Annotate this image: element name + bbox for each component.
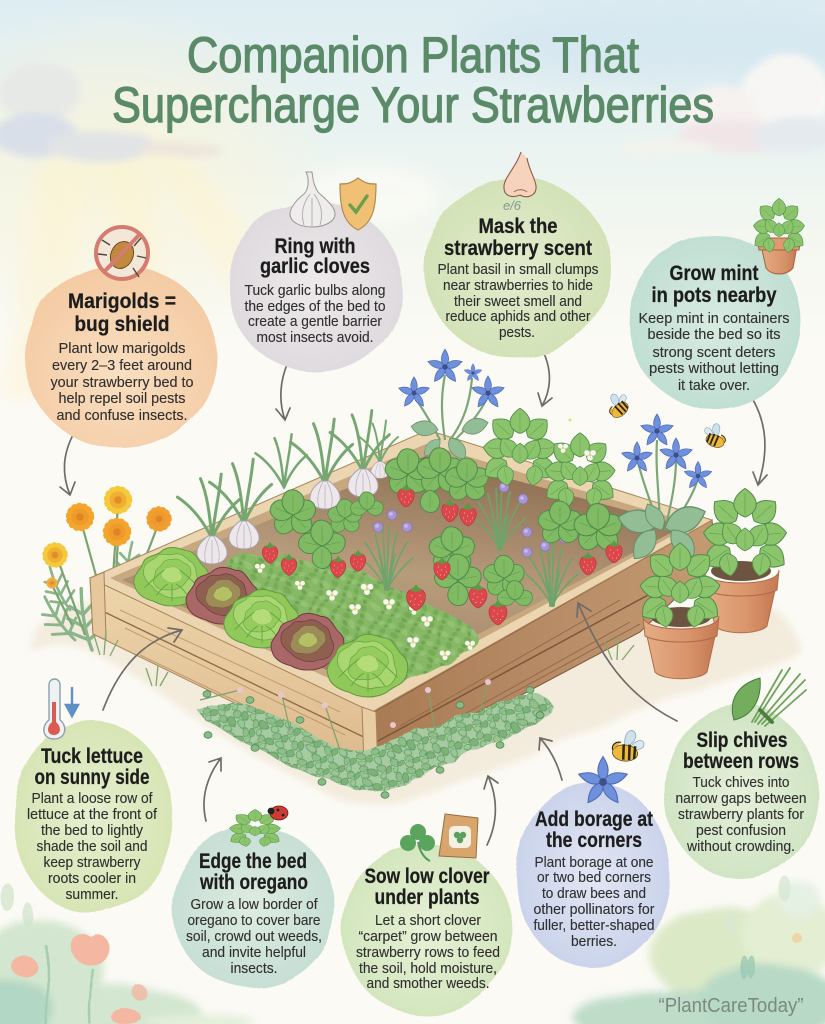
panel: mask scent: Plant basil in small clumps — [438, 262, 598, 278]
panel: lettuce: lettuce at the front of — [27, 807, 158, 823]
panel: mask scent: their sweet smell and — [454, 294, 582, 310]
panel: lettuce: the bed to lightly — [41, 823, 144, 839]
panel: chives — [665, 668, 817, 879]
panel: borage: other pollinators for — [534, 902, 655, 918]
panel: marigolds: help repel soil pests — [58, 391, 186, 407]
panel: marigolds: and confuse insects. — [56, 408, 188, 424]
panel: marigolds: Plant low marigolds — [58, 341, 186, 357]
panel: garlic — [228, 172, 402, 372]
bed: corner posts — [90, 572, 106, 640]
icon: mint pot — [751, 198, 807, 274]
panel: mint — [628, 198, 807, 409]
panel: mint: it take over. — [678, 378, 750, 394]
panel: mint: pests without letting — [649, 361, 779, 377]
icon: basil leaf — [732, 678, 760, 720]
oregano border — [195, 679, 552, 798]
icon: borage flower and bee — [577, 726, 648, 806]
panel: mask scent: near strawberries to hide — [443, 278, 593, 294]
arrow: garlic — [276, 358, 290, 420]
panel: lettuce: Tuck lettuce — [41, 745, 143, 768]
panel: oregano: and invite helpful — [202, 945, 306, 961]
panel: clover: Let a short clover — [375, 913, 481, 929]
title — [112, 27, 714, 133]
arrow: oregano — [204, 758, 221, 821]
panel: mask scent — [424, 152, 610, 358]
title: Companion Plants That — [187, 27, 639, 83]
panel: borage: or two bed corners — [537, 870, 651, 886]
panel: mask scent: reduce aphids and other — [446, 309, 591, 325]
panel: borage: to draw bees and — [542, 886, 646, 902]
panel: mask scent: pests. — [499, 325, 535, 341]
garlic row — [178, 410, 398, 564]
scribble: e/6 — [503, 198, 522, 213]
arrow: mask scent — [538, 347, 552, 406]
panel: oregano: with oregano — [199, 871, 308, 894]
foliage: bottom left watercolor — [0, 884, 255, 1024]
icon: chive bundle — [752, 668, 806, 726]
icon: oregano sprig with ladybug — [227, 806, 288, 847]
icon: shield — [340, 178, 376, 230]
panel: borage: the corners — [546, 829, 642, 852]
panel: chives: without crowding. — [686, 839, 795, 855]
panel: clover — [342, 814, 512, 1016]
panel: marigolds: your strawberry bed to — [50, 375, 194, 391]
clouds: right — [615, 53, 825, 155]
panel: mint: in pots nearby — [652, 284, 777, 307]
grass tufts — [94, 630, 634, 686]
panel: lettuce — [12, 679, 172, 914]
bed: right side wall — [374, 520, 716, 772]
panel: borage: Add borage at — [535, 808, 653, 831]
panel: marigolds: bug shield — [74, 313, 170, 336]
raised wooden bed — [90, 430, 716, 773]
panel: marigolds: Marigolds = — [68, 290, 176, 313]
panel: marigolds: every 2–3 feet around — [52, 358, 192, 374]
borage right and bees — [604, 390, 726, 564]
panel: lettuce: roots cooler in — [48, 871, 136, 887]
arrow: mint — [752, 398, 767, 485]
ground wash under bed — [30, 600, 800, 803]
panel: borage: fuller, better-shaped — [534, 918, 654, 934]
panel: marigolds — [25, 227, 217, 449]
arrow: clover — [484, 776, 498, 845]
panel: clover: strawberry rows to feed — [356, 945, 500, 961]
arrow: marigolds — [60, 433, 75, 495]
panel: chives: Slip chives — [696, 729, 788, 752]
icon: garlic bulb — [290, 172, 335, 227]
arrow: lettuce — [103, 628, 182, 710]
panel: mask scent: strawberry scent — [444, 237, 592, 260]
icon: no bugs — [96, 227, 148, 279]
panel: oregano — [171, 806, 335, 988]
panel: garlic: Ring with — [274, 235, 356, 258]
panel: mint: Grow mint — [670, 262, 758, 285]
panel: lettuce: on sunny side — [34, 766, 150, 789]
panel: chives: Tuck chives into — [692, 775, 790, 791]
icon: thermometer and arrow — [44, 679, 78, 739]
panel: oregano: Edge the bed — [199, 850, 307, 873]
bed: top rim — [90, 430, 712, 712]
panel: oregano: insects. — [230, 961, 278, 977]
icon: clover leaf — [400, 824, 435, 861]
foliage: bottom right watercolor — [570, 877, 825, 1024]
panel: chives: pest confusion — [696, 823, 786, 839]
panel: borage — [515, 726, 671, 968]
panel: garlic: create a gentle barrier — [248, 314, 382, 330]
panel: chives: strawberry plants for — [678, 807, 804, 823]
panel: clover: the soil, hold moisture, — [359, 961, 497, 977]
panel: clover: “carpet” grow between — [358, 929, 498, 945]
panel: mask scent: Mask the — [478, 215, 558, 238]
lettuce row — [134, 543, 408, 698]
potted mint and basil — [636, 488, 790, 679]
panel: clover: under plants — [374, 886, 480, 909]
watermark: “PlantCareToday” — [658, 995, 804, 1017]
panel: lettuce: summer. — [66, 887, 118, 903]
panel: clover: and smother weeds. — [366, 976, 490, 992]
bed: left front wall — [90, 578, 376, 772]
clouds: left — [0, 62, 222, 160]
marigolds beside bed — [32, 489, 169, 653]
clover carpet — [226, 555, 478, 685]
panel: oregano: oregano to cover bare — [188, 913, 320, 929]
chives in bed — [361, 482, 578, 606]
panel: garlic: most insects avoid. — [256, 330, 374, 346]
panel: borage: berries. — [571, 934, 617, 950]
bed: soil — [110, 444, 694, 698]
panel: oregano: soil, crowd out weeds, — [186, 929, 322, 945]
panel: chives: between rows — [683, 750, 799, 773]
panel: lettuce: keep strawberry — [44, 855, 141, 871]
panel: chives: narrow gaps between — [676, 791, 806, 807]
panel: garlic: Tuck garlic bulbs along — [244, 283, 386, 299]
panel: garlic: garlic cloves — [260, 255, 370, 278]
icon: nose — [504, 152, 536, 197]
panel: mint: Keep mint in containers — [638, 311, 790, 327]
panel: mint: strong scent deters — [652, 345, 776, 361]
panel: garlic: the edges of the bed to — [244, 299, 386, 315]
panel: lettuce: Plant a loose row of — [32, 791, 153, 807]
panel: borage: Plant borage at one — [534, 855, 654, 871]
arrow: chives — [577, 603, 677, 721]
panel: oregano: Grow a low border of — [190, 897, 318, 913]
strawberry plants — [262, 448, 534, 625]
panel: clover: Sow low clover — [364, 865, 490, 888]
title: Supercharge Your Strawberries — [112, 77, 714, 133]
borage back — [398, 349, 505, 463]
arrow: borage — [539, 738, 562, 780]
panel: lettuce: shade the soil and — [36, 839, 148, 855]
panel: mint: beside the bed so its — [648, 327, 780, 343]
basil clumps — [480, 408, 625, 575]
icon: seed packet — [439, 814, 478, 858]
